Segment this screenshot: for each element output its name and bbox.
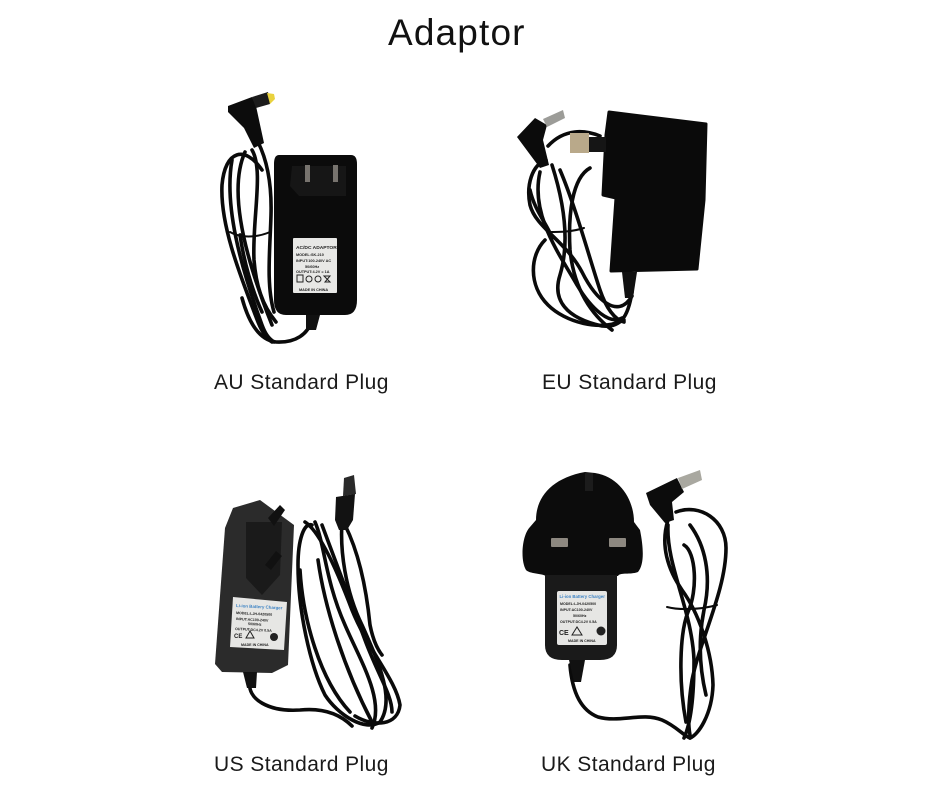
- panel: UK adaptor: [523, 470, 726, 738]
- icon: US connector: [335, 475, 356, 530]
- UK label: OUTPUT:DC4.2V 0.5A: [560, 620, 597, 624]
- UK label: INPUT:AC100-240V: [560, 608, 593, 612]
- icon: AU plug recess: [290, 166, 346, 196]
- icon: EU connector: [517, 110, 565, 168]
- icon: UK earth pin: [585, 473, 593, 491]
- panel: AU adaptor: [222, 92, 357, 342]
- caption: EU: EU Standard Plug: [542, 371, 717, 394]
- AU label: INPUT:100-240V AC: [296, 259, 331, 263]
- title: Adaptor: [388, 12, 526, 53]
- icon: AU cable: [222, 142, 312, 342]
- US label: MODEL:LJH-0420500: [236, 611, 272, 617]
- US label: [230, 597, 287, 650]
- icon: UK cable: [570, 510, 726, 738]
- US label: Li-ion Battery Charger: [236, 603, 283, 610]
- UK label: Li-ion Battery Charger: [560, 594, 605, 599]
- icon: EU strain relief: [622, 272, 637, 298]
- caption: US: US Standard Plug: [214, 753, 389, 776]
- AU label: OUTPUT:4.2V = 1A: [296, 270, 330, 274]
- AU label: MADE IN CHINA: [299, 288, 328, 292]
- UK label: 50/60Hz: [573, 614, 587, 618]
- icon: EU body: [603, 112, 706, 271]
- panel: US adaptor: [215, 475, 400, 728]
- US label: OUTPUT:DC4.2V 0.5A: [235, 627, 272, 633]
- icon: AU body: [274, 155, 357, 315]
- icon: AU strain relief: [306, 315, 320, 330]
- US label: CE: [234, 634, 242, 640]
- caption: AU: AU Standard Plug: [214, 371, 389, 394]
- icon: US cable: [250, 522, 400, 728]
- icon: EU cable: [529, 132, 632, 330]
- panel: EU adaptor: [517, 110, 706, 330]
- icon: EU prong: [570, 133, 606, 153]
- AU label: MODEL:SK-210: [296, 253, 324, 257]
- icon: US strain relief: [243, 672, 257, 688]
- icon: UK plug head: [523, 472, 643, 576]
- caption: UK: UK Standard Plug: [541, 753, 716, 776]
- icon: US prongs: [265, 505, 285, 570]
- UK label: CE: [559, 630, 569, 637]
- AU label: AC/DC ADAPTOR: [296, 245, 337, 251]
- UK label: MADE IN CHINA: [568, 639, 596, 643]
- icon: US body: [215, 500, 294, 673]
- icon: UK connector: [646, 470, 702, 523]
- icon: AU prongs: [305, 165, 338, 182]
- UK label: [557, 591, 607, 645]
- icon: UK prongs: [551, 538, 626, 547]
- icon: UK strain relief: [569, 660, 585, 682]
- US label: 50/60Hz: [248, 622, 262, 627]
- AU label: 50/60Hz: [305, 265, 319, 269]
- US label: INPUT:AC100-240V: [236, 617, 269, 623]
- icon: US plug recess: [246, 522, 282, 595]
- UK label: MODEL:LJH-0420500: [560, 602, 596, 606]
- icon: UK body: [545, 575, 617, 660]
- US label: MADE IN CHINA: [241, 643, 269, 647]
- icon: AU connector: [228, 92, 275, 148]
- AU label: [293, 238, 337, 293]
